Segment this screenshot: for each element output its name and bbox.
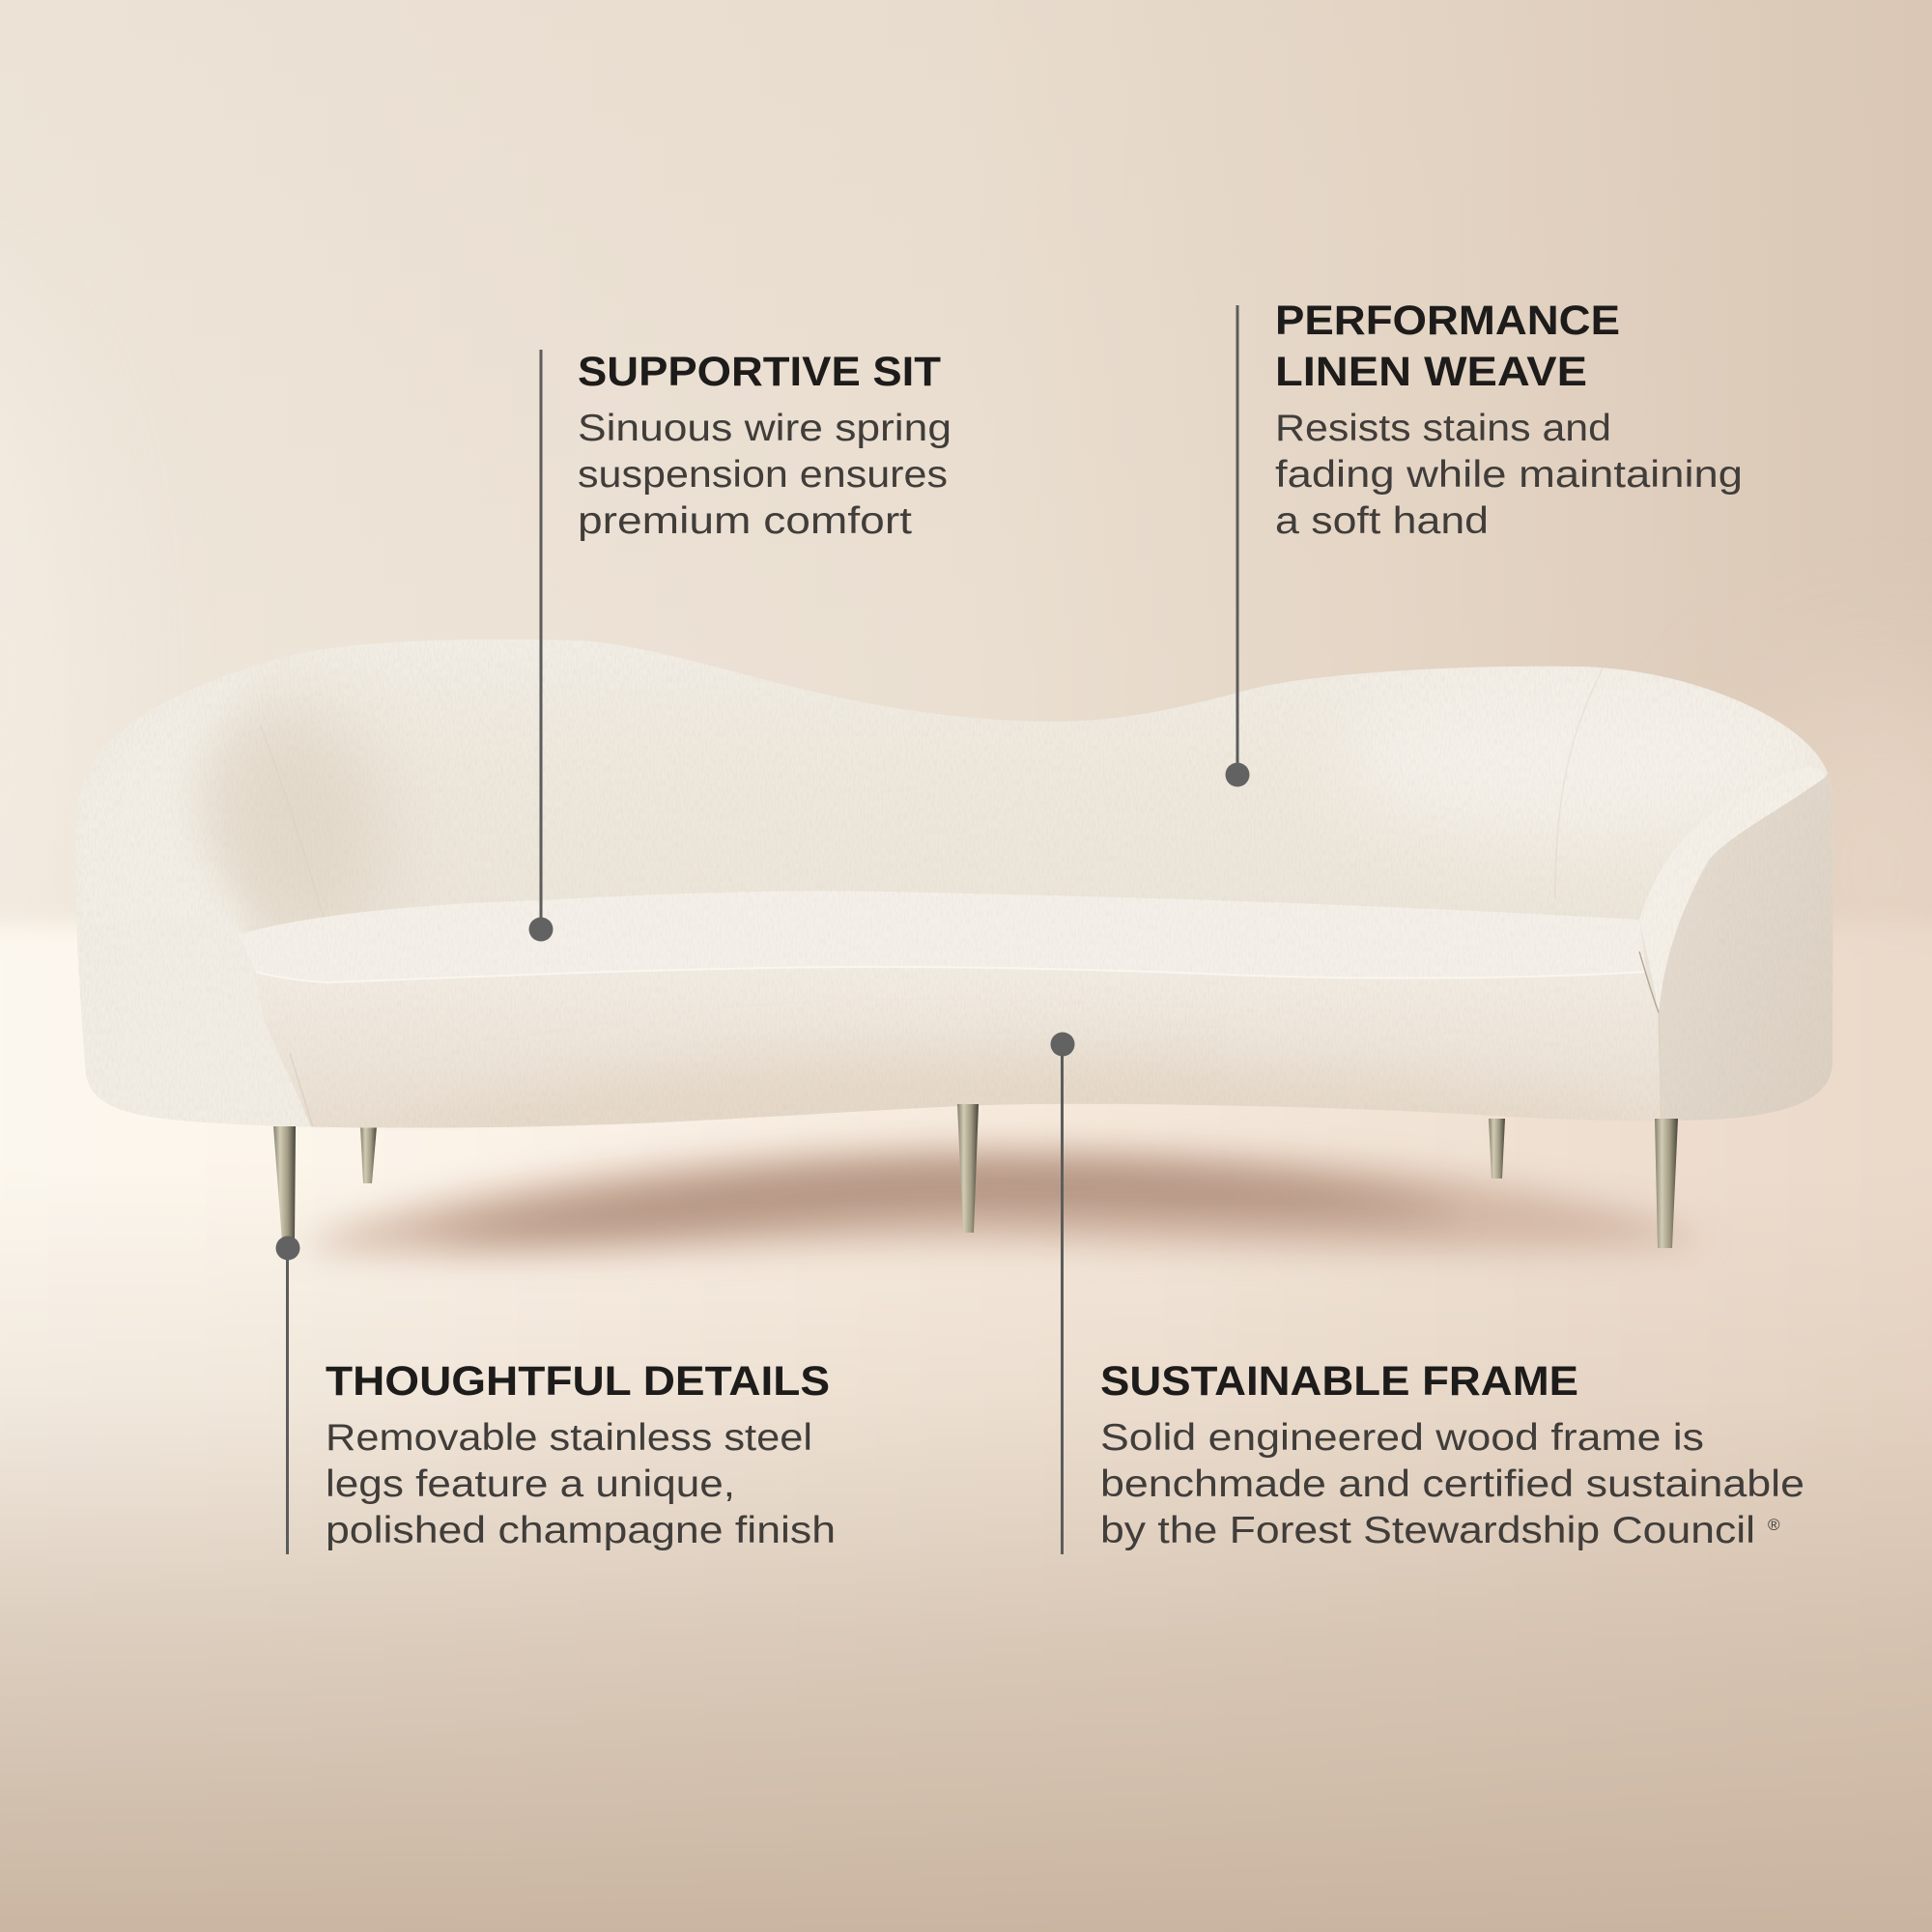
leg: center bbox=[957, 1104, 979, 1233]
leg: back left bbox=[360, 1126, 377, 1183]
description bbox=[326, 1417, 836, 1551]
heading: PERFORMANCE bbox=[1275, 298, 1620, 344]
seat top bbox=[239, 891, 1646, 982]
right arm outer panel bbox=[1660, 773, 1833, 1121]
callout: supportive sit bbox=[529, 350, 952, 941]
fabric weave texture bbox=[81, 643, 1789, 1116]
heading: LINEN WEAVE bbox=[1275, 350, 1587, 395]
description: benchmade and certified sustainable bbox=[1100, 1463, 1804, 1505]
heading bbox=[1275, 298, 1620, 395]
callout: thoughtful details bbox=[276, 1236, 836, 1554]
seat front panel bbox=[256, 967, 1663, 1135]
right arm roll bbox=[1639, 767, 1825, 1012]
description: polished champagne finish bbox=[326, 1510, 836, 1551]
description bbox=[1275, 408, 1743, 542]
description: by the Forest Stewardship Council bbox=[1100, 1510, 1755, 1551]
sofa seams bbox=[256, 667, 1662, 1130]
description: legs feature a unique, bbox=[326, 1463, 735, 1505]
sofa shadow on floor bbox=[299, 1148, 1710, 1254]
description: Resists stains and bbox=[1275, 408, 1611, 449]
description: suspension ensures bbox=[578, 454, 948, 496]
description: premium comfort bbox=[578, 500, 912, 542]
description bbox=[578, 408, 952, 542]
heading: SUSTAINABLE FRAME bbox=[1100, 1359, 1578, 1405]
description: a soft hand bbox=[1275, 500, 1489, 542]
sofa legs front bbox=[273, 1104, 1678, 1248]
leader line and dot bbox=[1051, 1032, 1074, 1554]
sofa legs back bbox=[360, 1119, 1505, 1183]
sofa silhouette bbox=[75, 639, 1833, 1127]
leader line and dot bbox=[276, 1236, 299, 1554]
heading: SUPPORTIVE SIT bbox=[578, 350, 941, 395]
description: Solid engineered wood frame is bbox=[1100, 1417, 1704, 1459]
callout: sustainable frame bbox=[1051, 1032, 1804, 1554]
description: Removable stainless steel bbox=[326, 1417, 812, 1459]
leg: back right bbox=[1489, 1119, 1505, 1179]
leg: front right bbox=[1655, 1119, 1678, 1248]
sofa body bbox=[58, 628, 1855, 1140]
left arm lower panel bbox=[79, 954, 311, 1126]
seat front warm shading bbox=[547, 1057, 1458, 1121]
leg: front left bbox=[273, 1126, 296, 1241]
description: ® bbox=[1768, 1516, 1780, 1534]
upper right bright roll bbox=[1370, 695, 1801, 835]
leader line and dot bbox=[1225, 305, 1250, 786]
left arm upper roll, soft bbox=[75, 719, 249, 933]
inner back shadow left bbox=[213, 703, 386, 925]
description: Sinuous wire spring bbox=[578, 408, 952, 449]
heading: THOUGHTFUL DETAILS bbox=[326, 1359, 830, 1405]
description bbox=[1100, 1417, 1804, 1551]
description: fading while maintaining bbox=[1275, 454, 1743, 496]
callout: performance linen weave bbox=[1225, 298, 1743, 786]
leader line and dot bbox=[529, 350, 553, 941]
